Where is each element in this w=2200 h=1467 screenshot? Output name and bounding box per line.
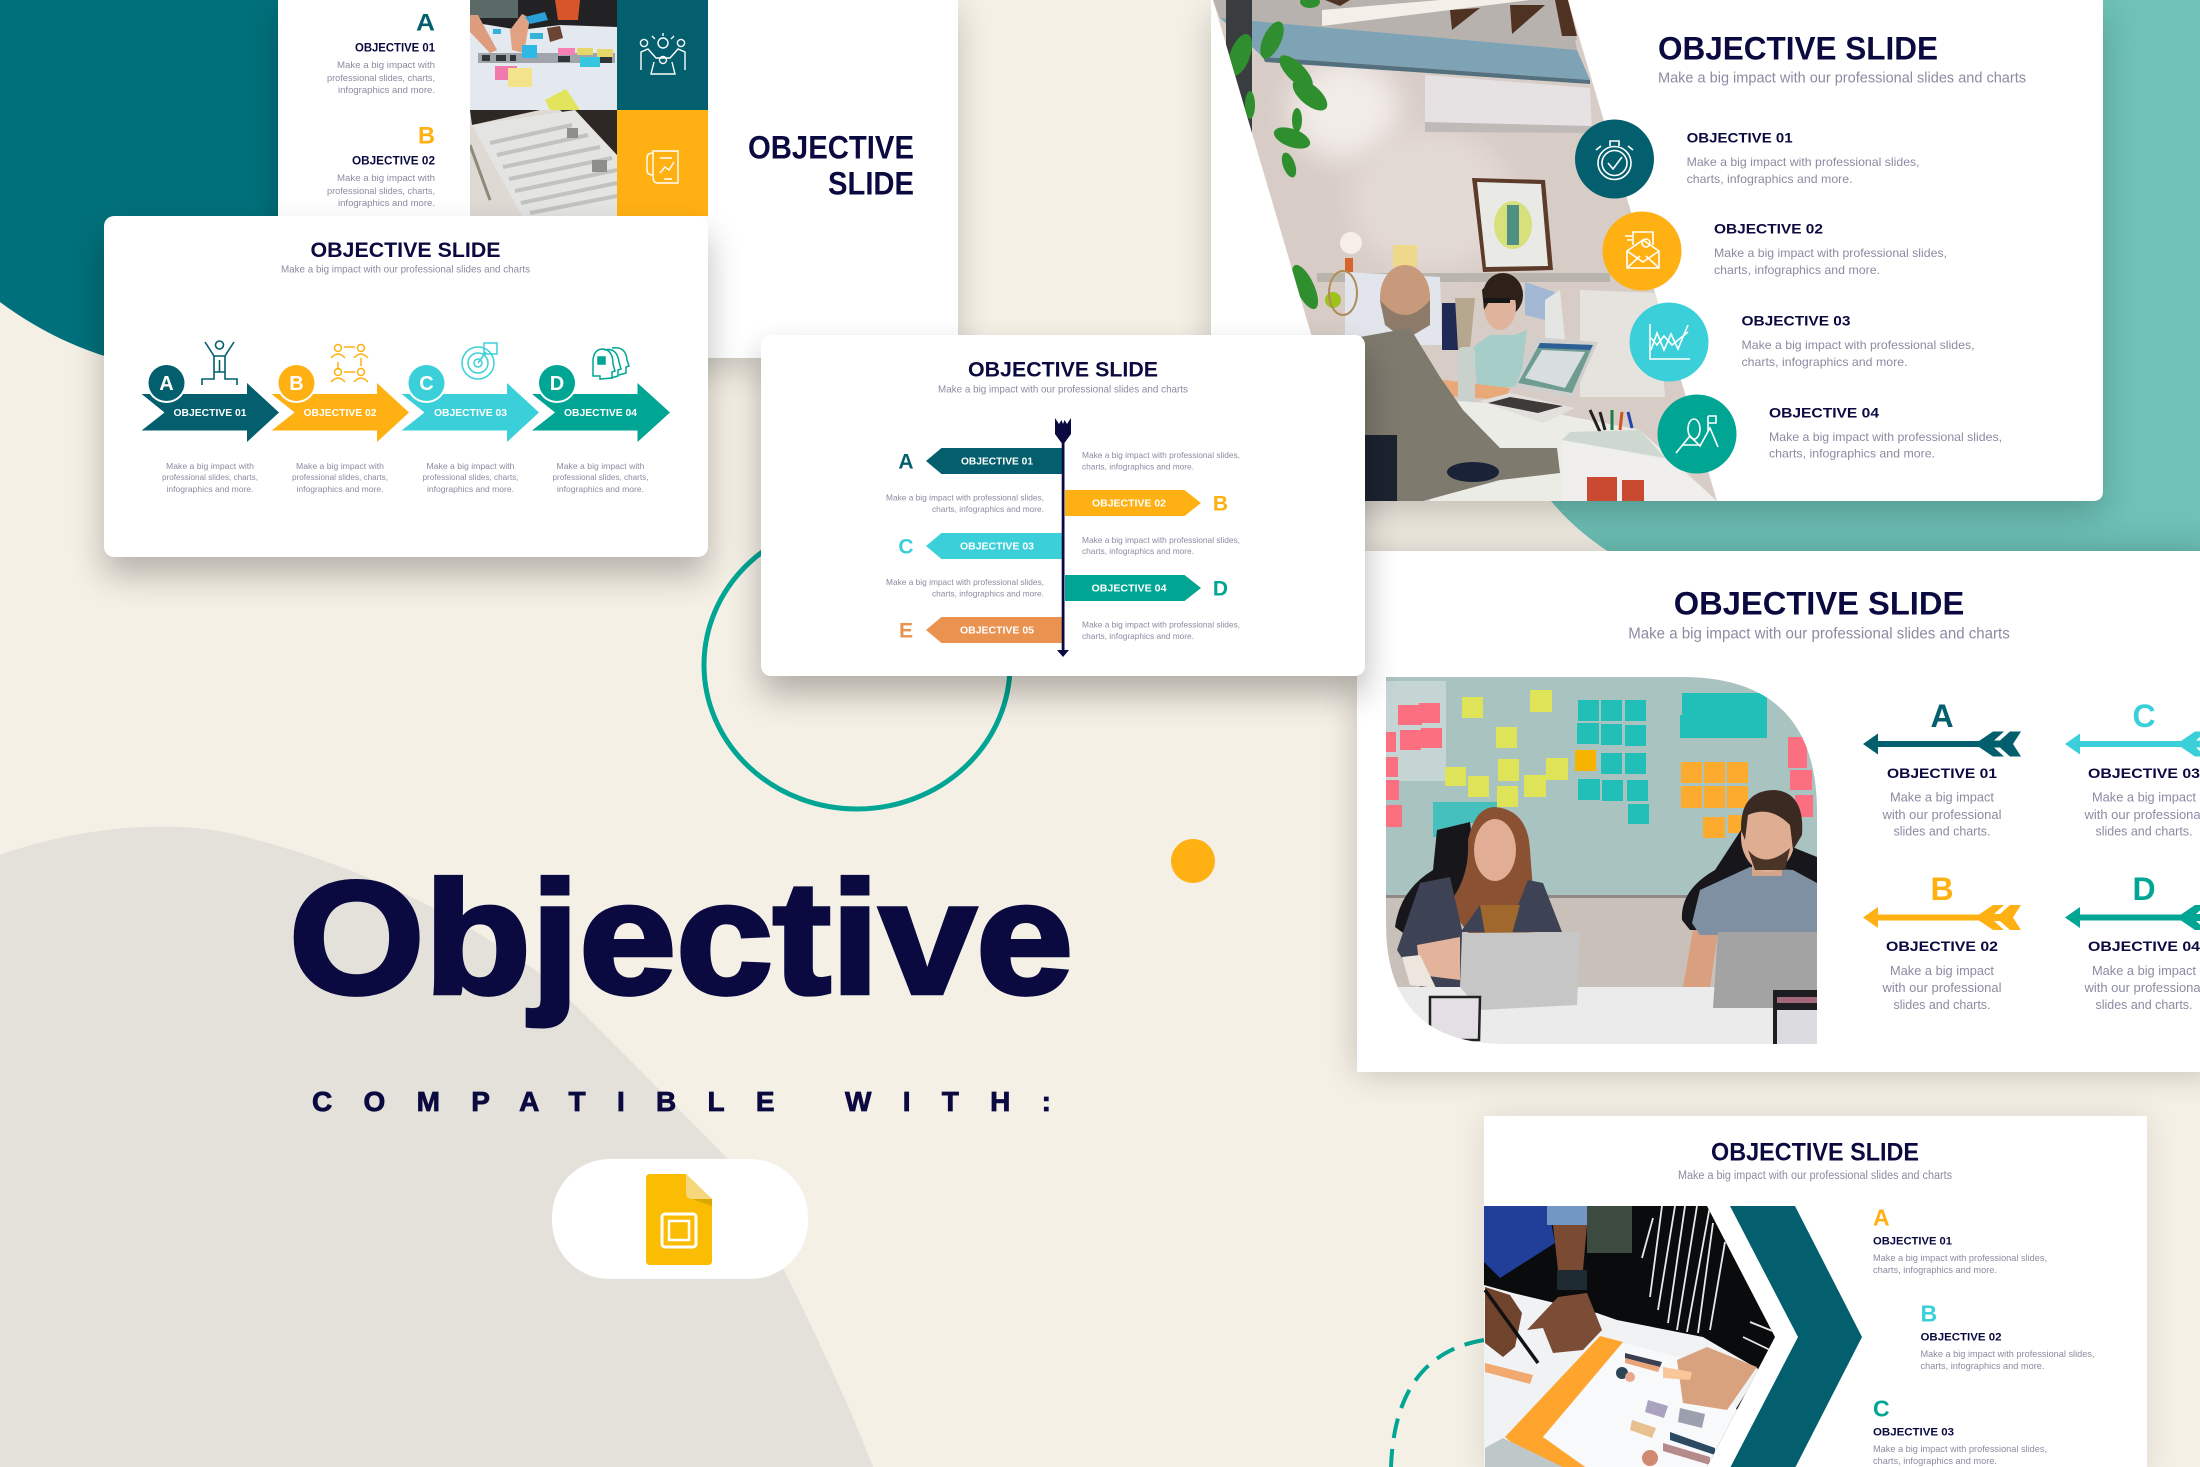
left column descriptions: Make a big impact with professional slides, — [886, 578, 1044, 587]
step A arrow — [142, 363, 279, 442]
description B: professional slides, charts, — [327, 186, 435, 196]
banner B — [1065, 490, 1228, 516]
step C arrow — [402, 363, 539, 442]
banner D: OBJECTIVE 04 — [1092, 584, 1167, 595]
description texts under arrows: Make a big impact with — [426, 462, 514, 471]
photo: hands over documents — [1484, 1206, 1784, 1467]
arrow C block: Make a big impact — [2092, 790, 2196, 804]
step D arrow — [532, 363, 670, 442]
objective 03 text: OBJECTIVE 03 — [1742, 314, 1851, 328]
description B — [327, 173, 435, 208]
arrow D block: D — [2132, 871, 2156, 907]
description B: Make a big impact with — [337, 173, 435, 183]
right column descriptions — [1082, 451, 1240, 641]
folder — [1505, 1336, 1623, 1467]
heading: OBJECTIVE SLIDE — [968, 358, 1158, 382]
slide 4: vertical arrow timeline — [761, 335, 1365, 694]
icon: mail in yellow circle — [1602, 212, 1682, 290]
description B: infographics and more. — [338, 198, 435, 208]
heading objective 02: OBJECTIVE 02 — [352, 154, 435, 168]
arrow D block: slides and charts. — [2096, 997, 2192, 1012]
arrow D block: Make a big impact — [2092, 963, 2196, 978]
description texts under arrows: professional slides, charts, — [292, 473, 388, 482]
pens — [1590, 410, 1632, 432]
photo: sticky notes on table — [470, 0, 617, 110]
description texts under arrows: infographics and more. — [557, 485, 644, 494]
step D arrow: OBJECTIVE 04 — [564, 408, 637, 419]
banner C: C — [898, 536, 914, 558]
description texts under arrows: infographics and more. — [427, 485, 514, 494]
objective C text: OBJECTIVE 03 — [1873, 1426, 1954, 1438]
woman — [1447, 807, 1537, 935]
description texts under arrows — [162, 462, 648, 494]
step B arrow: B — [289, 373, 304, 395]
objective A text: A — [1873, 1204, 1890, 1230]
objective 03 text: Make a big impact with professional slides, — [1742, 338, 1974, 352]
banner E: E — [899, 620, 913, 642]
woman — [1484, 273, 1523, 312]
arrow D block — [2065, 871, 2200, 1012]
objective 02 text — [1714, 222, 1947, 277]
decorative light teal shape top right — [1500, 0, 2200, 552]
objective C text — [1873, 1396, 2047, 1467]
objective A text: OBJECTIVE 01 — [1873, 1236, 1952, 1248]
decorative grey blob — [0, 827, 873, 1467]
objective 02 text: charts, infographics and more. — [1714, 263, 1880, 277]
icon: google slides — [646, 1174, 712, 1265]
heading: OBJECTIVE SLIDE — [1711, 1138, 1919, 1166]
laptops — [1460, 932, 1580, 1010]
photo: office meeting — [1200, 0, 1730, 510]
icon: stopwatch in teal circle — [1575, 120, 1654, 198]
arrow A block: A — [1930, 698, 1954, 734]
compatible with label: COMPATIBLE WITH: — [312, 1086, 1051, 1117]
decorative teal ring — [704, 521, 1010, 809]
right column descriptions: Make a big impact with professional slides, — [1082, 620, 1240, 630]
arrow A block: slides and charts. — [1894, 824, 1990, 838]
heading: OBJECTIVE SLIDE — [1658, 30, 1938, 66]
slide 2: arrow process — [104, 216, 708, 575]
description texts under arrows: infographics and more. — [166, 485, 254, 494]
banner D — [1065, 575, 1228, 601]
objective B text: OBJECTIVE 02 — [1920, 1332, 2002, 1344]
icon: people cycle — [331, 344, 368, 382]
yellow dot — [1171, 839, 1215, 883]
objective 01 text: OBJECTIVE 01 — [1687, 130, 1793, 146]
arrow A block — [1863, 698, 2021, 838]
description texts under arrows: professional slides, charts, — [552, 473, 648, 482]
description texts under arrows: infographics and more. — [296, 485, 384, 494]
decorative teal circle top left — [0, 0, 568, 373]
dashed arc decoration — [1391, 1340, 1484, 1467]
heading objective slide (right aligned): OBJECTIVE — [748, 130, 914, 166]
teal block with team icon — [617, 0, 708, 110]
left column descriptions — [886, 494, 1044, 598]
subheading: Make a big impact with our professional slides and charts — [1658, 70, 2026, 86]
letter A: A — [416, 10, 435, 36]
objective B text: charts, infographics and more. — [1920, 1361, 2044, 1372]
left column descriptions: charts, infographics and more. — [932, 505, 1044, 514]
right column descriptions: charts, infographics and more. — [1082, 547, 1194, 556]
arrow C block: OBJECTIVE 03 — [2088, 765, 2200, 781]
objective B text: Make a big impact with professional slides, — [1920, 1349, 2094, 1360]
description texts under arrows: Make a big impact with — [556, 462, 644, 471]
description texts under arrows: Make a big impact with — [296, 462, 384, 471]
right column descriptions: Make a big impact with professional slides, — [1082, 451, 1240, 460]
step A arrow: OBJECTIVE 01 — [174, 408, 247, 419]
doc details — [1625, 1353, 1662, 1367]
arrow C block — [2065, 698, 2200, 838]
banner C — [898, 533, 1062, 559]
banner E: OBJECTIVE 05 — [960, 626, 1034, 637]
objective 02 text: Make a big impact with professional slides, — [1714, 246, 1947, 260]
arrow D block: OBJECTIVE 04 — [2088, 938, 2200, 954]
description A: Make a big impact with — [337, 60, 435, 70]
icon: chart in cyan circle — [1630, 302, 1708, 382]
subheading: Make a big impact with our professional slides and charts — [1678, 1170, 1952, 1182]
objective A text — [1873, 1204, 2047, 1276]
arrow C block: C — [2132, 698, 2156, 734]
banner B: B — [1213, 492, 1228, 516]
objective 04 text — [1769, 406, 2002, 460]
man — [1380, 265, 1430, 315]
objective 01 text: charts, infographics and more. — [1687, 172, 1853, 186]
objective A text: charts, infographics and more. — [1873, 1265, 1997, 1276]
banner D: D — [1213, 578, 1228, 600]
chairs — [1395, 822, 1471, 933]
right column descriptions: charts, infographics and more. — [1082, 462, 1194, 472]
step A arrow: A — [159, 373, 174, 395]
slide 6: chevron photo — [1484, 1116, 2147, 1467]
left column descriptions: Make a big impact with professional slides, — [886, 494, 1044, 502]
main title: Objective — [289, 848, 1073, 1027]
objective 03 text — [1742, 314, 1974, 369]
heading: OBJECTIVE SLIDE — [1674, 586, 1964, 622]
objective 01 text — [1687, 130, 1920, 186]
objective B text: B — [1920, 1300, 1937, 1326]
step D arrow: D — [550, 373, 564, 395]
objective 04 text: Make a big impact with professional slides, — [1769, 430, 2002, 444]
arm and hand — [1553, 1225, 1587, 1270]
banner A: A — [898, 450, 914, 474]
ceiling — [1213, 0, 1577, 50]
plant — [1229, 0, 1328, 310]
man — [1683, 930, 1718, 987]
description A: infographics and more. — [338, 85, 435, 95]
arrow B block: B — [1930, 871, 1954, 907]
heading objective slide (right aligned): SLIDE — [828, 166, 914, 202]
step B arrow — [272, 363, 409, 442]
laptop — [1515, 337, 1598, 398]
left column descriptions: charts, infographics and more. — [932, 590, 1044, 598]
description texts under arrows: professional slides, charts, — [422, 473, 518, 482]
step B arrow: OBJECTIVE 02 — [304, 408, 377, 419]
banner B: OBJECTIVE 02 — [1092, 499, 1166, 510]
banner A: OBJECTIVE 01 — [961, 457, 1033, 468]
objective 04 text: charts, infographics and more. — [1769, 446, 1935, 460]
objective B text — [1920, 1300, 2094, 1372]
description A — [327, 60, 435, 95]
arrow B block: OBJECTIVE 02 — [1886, 938, 1998, 954]
subheading: Make a big impact with our professional slides and charts — [281, 264, 530, 276]
slide 5: photo with arrows — [1357, 551, 2200, 1072]
arrow B block — [1863, 871, 2021, 1012]
icon: heads with puzzle — [593, 348, 629, 379]
objective C text: C — [1873, 1396, 1890, 1422]
documents — [1543, 1400, 1737, 1467]
heading objective slide (right aligned) — [748, 130, 914, 202]
photo: paperwork — [470, 110, 617, 216]
objective A text: Make a big impact with professional slides, — [1873, 1253, 2047, 1264]
right column descriptions: Make a big impact with professional slides, — [1082, 536, 1240, 545]
heading: OBJECTIVE SLIDE — [310, 239, 500, 262]
white pill with Google Slides icon — [552, 1159, 808, 1279]
arrow A block: with our professional — [1882, 807, 2002, 822]
arrow B block: Make a big impact — [1890, 963, 1994, 978]
banner E — [899, 617, 1062, 643]
slide 3: objectives with office photo — [1200, 0, 2103, 515]
subheading: Make a big impact with our professional slides and charts — [1628, 626, 2010, 642]
vertical arrow — [1055, 418, 1071, 657]
photo: team at table with sticky notes — [1386, 677, 1823, 1047]
arrow A block: Make a big impact — [1890, 790, 1994, 804]
objective 04 text: OBJECTIVE 04 — [1769, 406, 1880, 420]
shelf — [1562, 440, 1717, 501]
table — [1484, 1285, 1760, 1467]
arrow C block: slides and charts. — [2096, 824, 2192, 838]
right column descriptions: charts, infographics and more. — [1082, 632, 1194, 641]
teal chevron — [1730, 1206, 1862, 1467]
objective 01 text: Make a big impact with professional slides, — [1687, 155, 1920, 169]
yellow block with report icon — [617, 110, 708, 216]
heading objective 01: OBJECTIVE 01 — [355, 40, 435, 54]
description A: professional slides, charts, — [327, 73, 435, 83]
description texts under arrows: Make a big impact with — [166, 462, 254, 471]
objective C text: Make a big impact with professional slides, — [1873, 1444, 2047, 1455]
monitor left — [1345, 272, 1442, 345]
desk — [1430, 400, 1717, 501]
icon: person raising arms — [202, 341, 237, 385]
arrow B block: with our professional — [1882, 980, 2002, 995]
arrow A block: OBJECTIVE 01 — [1887, 765, 1997, 781]
subheading: Make a big impact with our professional slides and charts — [938, 384, 1188, 396]
icon: target — [462, 343, 497, 379]
banner A — [898, 448, 1062, 474]
step C arrow: C — [419, 373, 434, 395]
banner C: OBJECTIVE 03 — [960, 542, 1034, 553]
objective 02 text: OBJECTIVE 02 — [1714, 222, 1823, 236]
step C arrow: OBJECTIVE 03 — [434, 408, 507, 419]
objective 03 text: charts, infographics and more. — [1742, 355, 1908, 369]
slide 1: objectives with photos — [278, 0, 958, 368]
arrow B block: slides and charts. — [1894, 997, 1990, 1012]
description texts under arrows: professional slides, charts, — [162, 473, 258, 482]
letter B: B — [418, 122, 435, 150]
icon: mountain flag in green circle — [1658, 394, 1736, 474]
objective C text: charts, infographics and more. — [1873, 1456, 1997, 1467]
